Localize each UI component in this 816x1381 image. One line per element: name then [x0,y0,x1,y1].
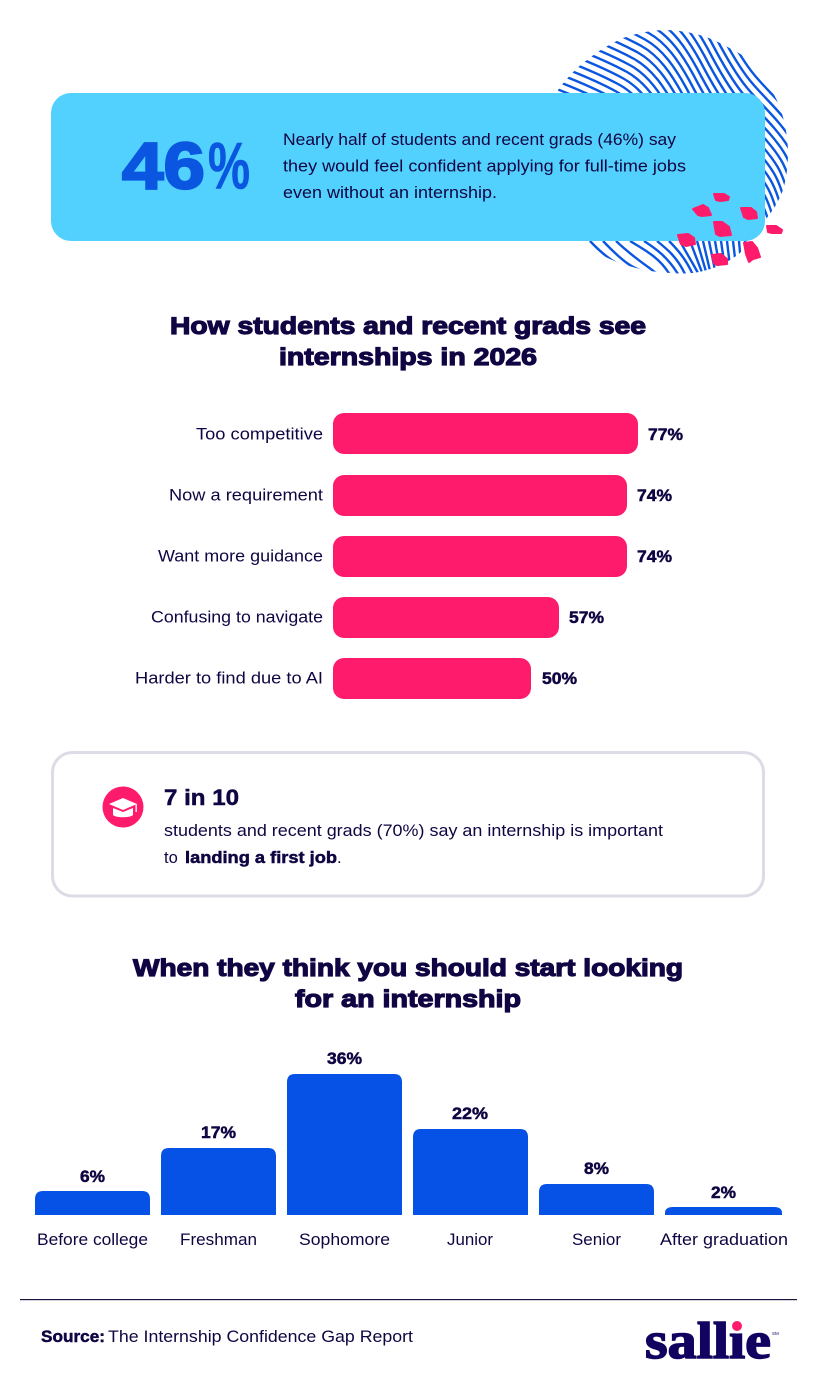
column: freshman: Freshman [180,1231,257,1249]
panel: 7 in 10 callout [52,752,764,896]
heading: when to start looking: for an internship [295,986,521,1013]
heading: when to start looking [133,955,683,1013]
column: after graduation [660,1184,788,1249]
column: before college: 6% [80,1168,105,1186]
column: sophomore: 36% [327,1050,362,1068]
column: freshman: 17% [201,1124,236,1142]
source note: Source: [41,1328,105,1346]
column: sophomore [287,1050,402,1249]
column: junior [413,1105,528,1249]
row: harder to find due to AI: 50% [542,670,577,688]
row: want more guidance: Want more guidance [158,548,323,566]
column: after graduation: After graduation [660,1231,788,1249]
logo: sallie: SM [772,1331,779,1336]
column: before college: Before college [37,1231,148,1249]
callout body: . [337,849,342,867]
row: want more guidance [158,536,672,577]
row: now a requirement [169,475,672,516]
row: confusing to navigate: Confusing to navigate [151,608,323,626]
decorative striped blob [558,30,788,274]
decorative pink brush marks [678,194,782,265]
bar chart: when to start [35,1050,788,1249]
logo: sallie: sallie [645,1313,771,1370]
callout text: even without an internship. [283,184,497,202]
callout text: Nearly half of students and recent grads (46%) say [283,131,677,149]
panel: 46% callout card [51,93,765,241]
column: senior [539,1160,654,1249]
big stat: 46%: 46 [122,128,205,202]
column: sophomore: Sophomore [299,1231,390,1249]
big stat: 46% [122,128,250,202]
heading: how students see internships: How students and recent grads see [170,313,646,340]
callout body [164,822,663,867]
callout body: students and recent grads (70%) say an internship is important [164,822,663,840]
icon: graduation cap [102,786,144,828]
row: harder to find due to AI [135,658,577,699]
source note: The Internship Confidence Gap Report [108,1328,413,1346]
row: confusing to navigate [151,597,604,638]
heading: how students see internships [170,313,646,371]
row: now a requirement: 74% [637,487,672,505]
callout text [283,131,686,202]
row: too competitive: 77% [648,426,683,444]
column: after graduation: 2% [711,1184,736,1202]
row: want more guidance: 74% [637,548,672,566]
callout body: landing a first job [185,849,337,867]
stat heading: 7 in 10 [164,785,239,810]
heading: how students see internships: internships in 2026 [279,344,537,371]
row: too competitive: Too competitive [196,426,323,444]
row: harder to find due to AI: Harder to find due to AI [135,670,323,688]
column: junior: 22% [452,1105,488,1123]
heading: when to start looking: When they think you should start looking [133,955,683,982]
row: now a requirement: Now a requirement [169,486,323,504]
callout text: they would feel confident applying for full-time jobs [283,158,686,176]
column: senior: 8% [584,1160,609,1178]
big stat: 46%: % [208,128,250,202]
callout body: to [164,849,178,867]
row: too competitive [196,413,683,454]
column: junior: Junior [447,1231,494,1249]
bar chart: internship perceptions [135,413,683,699]
column: freshman [161,1124,276,1249]
row: confusing to navigate: 57% [569,609,604,627]
column: before college [35,1168,150,1249]
column: senior: Senior [572,1231,622,1249]
